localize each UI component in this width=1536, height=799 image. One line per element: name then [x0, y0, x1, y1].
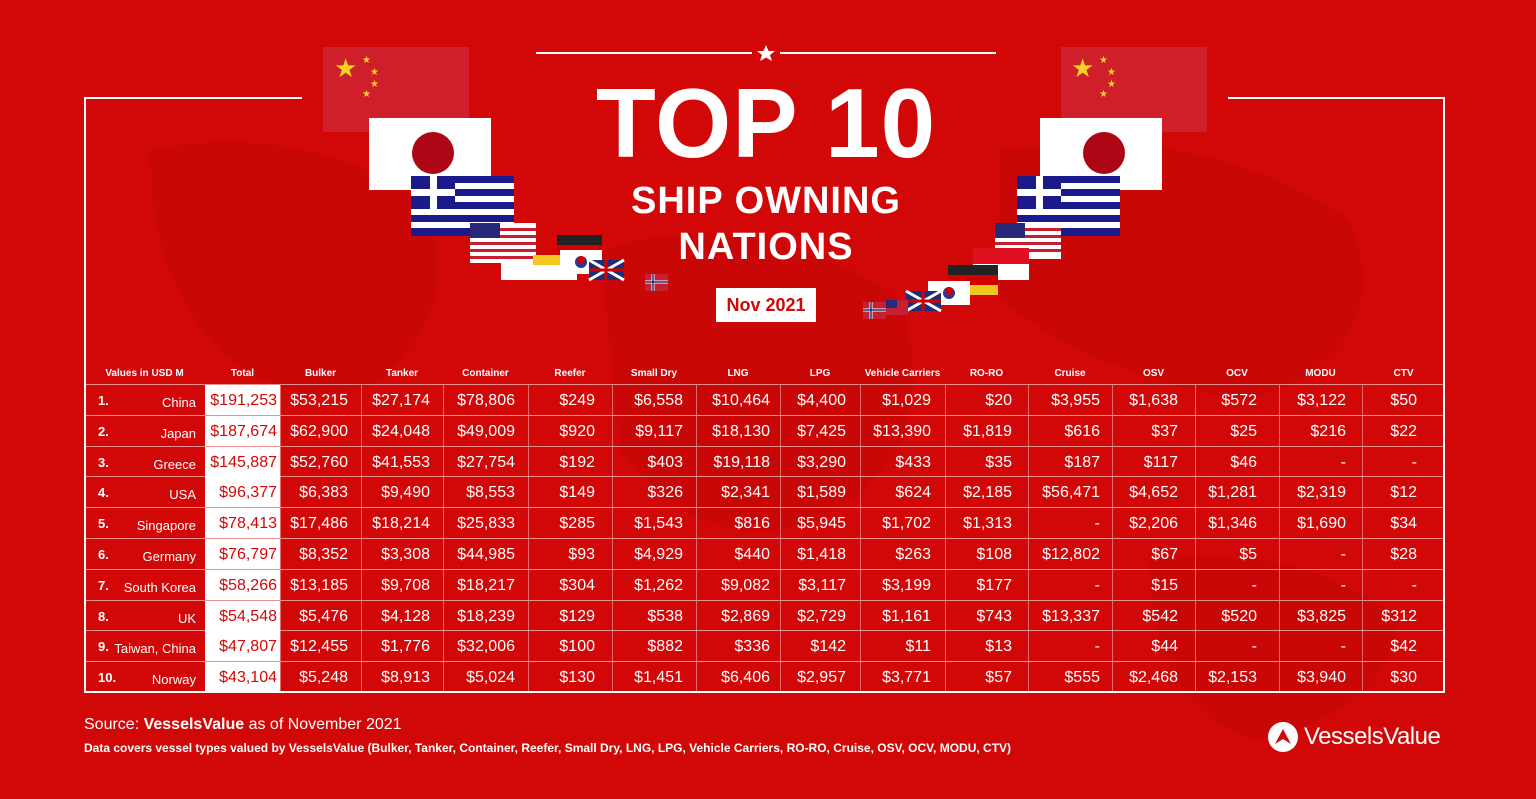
text: OSV	[1143, 368, 1164, 379]
row: China: $6,558	[634, 392, 683, 409]
row: Greece: $433	[895, 454, 931, 471]
title: SHIP OWNING	[631, 180, 901, 222]
row: Norway: $2,153	[1208, 669, 1257, 686]
row: USA: $12	[1390, 484, 1417, 501]
row: Singapore: $1,543	[634, 515, 683, 532]
row: Japan: $920	[559, 423, 595, 440]
row: Greece: 3.	[98, 455, 109, 470]
row: Greece: $403	[647, 454, 683, 471]
row: USA: $2,341	[721, 484, 770, 501]
row: Norway: $6,406	[721, 669, 770, 686]
row: UK: $2,869	[721, 608, 770, 625]
row: Singapore: $18,214	[372, 515, 430, 532]
row: Singapore: -	[1095, 515, 1100, 532]
row: Taiwan: $11	[905, 638, 931, 655]
row: Singapore: $285	[559, 515, 595, 532]
row: UK: UK	[178, 611, 196, 626]
row: Taiwan: $1,776	[381, 638, 430, 655]
row: UK: $542	[1142, 608, 1178, 625]
row: Taiwan: $336	[734, 638, 770, 655]
text: LNG	[727, 368, 749, 379]
flags: right cascade: ★	[1099, 55, 1108, 66]
text: Reefer	[554, 368, 586, 379]
flags: left cascade: ★	[370, 79, 379, 90]
row: Norway: 10.	[98, 670, 116, 685]
text: Values in USD M	[105, 368, 184, 379]
row: UK: $129	[559, 608, 595, 625]
row: China: China	[162, 395, 196, 410]
row: Japan: Japan	[161, 426, 196, 441]
row: China: $50	[1390, 392, 1417, 409]
row: South Korea: South Korea	[124, 580, 196, 595]
text: RO-RO	[970, 368, 1003, 379]
row: China: $191,253	[210, 392, 277, 409]
row: Japan: $616	[1064, 423, 1100, 440]
row: South Korea: $1,262	[634, 577, 683, 594]
row: USA: $2,185	[963, 484, 1012, 501]
source note: Source: VesselsValue as of November 2021	[84, 716, 402, 733]
row: Norway: Norway	[152, 672, 196, 687]
flags: right cascade: ★	[1071, 53, 1094, 83]
text: Total	[231, 368, 254, 379]
row: Greece: $19,118	[713, 454, 770, 471]
row: China: $27,174	[372, 392, 430, 409]
title: TOP 10	[596, 68, 936, 178]
row: Taiwan: $13	[985, 638, 1012, 655]
row: Taiwan: $47,807	[219, 638, 277, 655]
text: Vehicle Carriers	[865, 368, 940, 379]
row: China: 1.	[98, 393, 109, 408]
row: Germany: $5	[1239, 546, 1257, 563]
row: Germany: $4,929	[634, 546, 683, 563]
row: Germany: $76,797	[219, 546, 277, 563]
row: South Korea: $9,082	[721, 577, 770, 594]
row: Japan: $216	[1310, 423, 1346, 440]
row: Japan: $18,130	[712, 423, 770, 440]
row: China: $53,215	[290, 392, 348, 409]
row: Taiwan: Taiwan, China	[114, 641, 196, 656]
row: Japan: $22	[1390, 423, 1417, 440]
row: Singapore: $34	[1390, 515, 1417, 532]
row: Taiwan: -	[1341, 638, 1346, 655]
row: UK	[84, 600, 1445, 631]
row: USA: $56,471	[1042, 484, 1100, 501]
row: Greece: -	[1412, 454, 1417, 471]
row: Taiwan: $12,455	[290, 638, 348, 655]
row: South Korea	[84, 569, 1445, 600]
row: Japan: $1,819	[963, 423, 1012, 440]
row: Taiwan: -	[1252, 638, 1257, 655]
row: Greece: $35	[985, 454, 1012, 471]
row: Japan	[84, 415, 1445, 446]
row: Norway: $2,468	[1129, 669, 1178, 686]
row: Greece: $52,760	[290, 454, 348, 471]
row: Norway: $5,248	[299, 669, 348, 686]
row: Greece: $41,553	[372, 454, 430, 471]
row: USA: $2,319	[1297, 484, 1346, 501]
row: China: $1,638	[1129, 392, 1178, 409]
flags: left cascade	[323, 47, 668, 291]
row: Singapore: 5.	[98, 516, 109, 531]
row: Germany	[84, 538, 1445, 569]
row: China: $249	[559, 392, 595, 409]
row: Japan: $13,390	[873, 423, 931, 440]
row: Greece: $46	[1230, 454, 1257, 471]
row: Japan: 2.	[98, 424, 109, 439]
row: Singapore: $1,690	[1297, 515, 1346, 532]
flags: right cascade	[863, 47, 1207, 319]
row: Singapore: $2,206	[1129, 515, 1178, 532]
row: UK: $520	[1221, 608, 1257, 625]
row: China: $20	[985, 392, 1012, 409]
row: USA: USA	[169, 487, 196, 502]
row: China: $572	[1221, 392, 1257, 409]
row: China: $78,806	[457, 392, 515, 409]
row: UK: $743	[976, 608, 1012, 625]
row: South Korea: $3,199	[882, 577, 931, 594]
row: South Korea: -	[1412, 577, 1417, 594]
row: South Korea: $9,708	[381, 577, 430, 594]
row: Taiwan: -	[1095, 638, 1100, 655]
text: Cruise	[1054, 368, 1086, 379]
row: South Korea: $3,117	[798, 577, 846, 594]
row: UK: 8.	[98, 609, 109, 624]
row: Taiwan: $42	[1390, 638, 1417, 655]
flags: left cascade: ★	[362, 55, 371, 66]
row: USA	[84, 476, 1445, 507]
row: Germany: 6.	[98, 547, 109, 562]
row: USA: $8,553	[466, 484, 515, 501]
row: Taiwan: 9.	[98, 639, 109, 654]
row: USA: $149	[559, 484, 595, 501]
flags: right cascade: ★	[1107, 67, 1116, 78]
flags: left cascade: ★	[362, 89, 371, 100]
text: Small Dry	[631, 368, 677, 379]
row: Germany: $93	[568, 546, 595, 563]
row: USA: $624	[895, 484, 931, 501]
row: Germany: $44,985	[457, 546, 515, 563]
row: Singapore: $1,702	[882, 515, 931, 532]
row: Singapore: $1,313	[963, 515, 1012, 532]
row: Norway: $30	[1390, 669, 1417, 686]
row: Germany: -	[1341, 546, 1346, 563]
row: China: $3,955	[1051, 392, 1100, 409]
row: Taiwan: $882	[647, 638, 683, 655]
row: China: $10,464	[712, 392, 770, 409]
row: Greece: $192	[559, 454, 595, 471]
row: USA: $326	[647, 484, 683, 501]
row: Germany: $28	[1390, 546, 1417, 563]
row: Germany: $108	[976, 546, 1012, 563]
table rows	[86, 384, 1443, 691]
row: Japan: $49,009	[457, 423, 515, 440]
row: Taiwan: $44	[1151, 638, 1178, 655]
row: Singapore: $25,833	[457, 515, 515, 532]
row: South Korea: $13,185	[290, 577, 348, 594]
text: MODU	[1305, 368, 1336, 379]
row: Norway: $2,957	[797, 669, 846, 686]
row: South Korea: $18,217	[457, 577, 515, 594]
row: Norway: $43,104	[219, 669, 277, 686]
row: Japan: $25	[1230, 423, 1257, 440]
row: Japan: $7,425	[797, 423, 846, 440]
row: Germany: $67	[1151, 546, 1178, 563]
row: Taiwan: $32,006	[457, 638, 515, 655]
flags: right cascade: ★	[1099, 89, 1108, 100]
title	[596, 68, 936, 268]
flags: left cascade: ★	[334, 53, 357, 83]
row: Norway: $555	[1064, 669, 1100, 686]
row: Norway	[84, 661, 1445, 692]
flags: left cascade: ★	[370, 67, 379, 78]
row: Greece: $187	[1064, 454, 1100, 471]
row: USA: 4.	[98, 485, 109, 500]
row: South Korea: $177	[976, 577, 1012, 594]
row: USA: $9,490	[381, 484, 430, 501]
row: Germany: $440	[734, 546, 770, 563]
row: UK: $538	[647, 608, 683, 625]
text: Tanker	[386, 368, 418, 379]
row: UK: $3,825	[1297, 608, 1346, 625]
row: UK: $1,161	[882, 608, 931, 625]
row: Norway: $1,451	[634, 669, 683, 686]
row: Germany: Germany	[143, 549, 196, 564]
row: Taiwan: $142	[810, 638, 846, 655]
title: NATIONS	[678, 226, 854, 268]
row: Greece: -	[1341, 454, 1346, 471]
text: CTV	[1394, 368, 1414, 379]
date badge: Nov 2021	[726, 295, 806, 315]
row: China: $3,122	[1297, 392, 1346, 409]
row: USA: $1,589	[797, 484, 846, 501]
row: South Korea: $304	[559, 577, 595, 594]
row: UK: $312	[1381, 608, 1417, 625]
row: South Korea: -	[1095, 577, 1100, 594]
row: USA: $96,377	[219, 484, 277, 501]
row: USA: $4,652	[1129, 484, 1178, 501]
date badge	[716, 288, 816, 322]
row: Norway: $8,913	[381, 669, 430, 686]
row: Singapore: $816	[734, 515, 770, 532]
row: Norway: $3,771	[882, 669, 931, 686]
row: South Korea: 7.	[98, 578, 109, 593]
flags: right cascade: ★	[1107, 79, 1116, 90]
row: Germany: $8,352	[299, 546, 348, 563]
row: Singapore: $5,945	[797, 515, 846, 532]
text: LPG	[810, 368, 830, 379]
row: South Korea: $58,266	[219, 577, 277, 594]
row: UK: $18,239	[457, 608, 515, 625]
text: Container	[462, 368, 509, 379]
row: Singapore: Singapore	[137, 518, 196, 533]
row: Taiwan: $100	[559, 638, 595, 655]
row: Norway: $57	[985, 669, 1012, 686]
row: China	[84, 384, 1445, 415]
row: South Korea: -	[1341, 577, 1346, 594]
text: OCV	[1226, 368, 1248, 379]
row: South Korea: -	[1252, 577, 1257, 594]
logo: VesselsValue: VesselsValue	[1304, 723, 1440, 750]
row: Greece: $117	[1144, 454, 1178, 471]
row: Greece: $3,290	[797, 454, 846, 471]
data coverage note: Data covers vessel types valued by VesselsValue (Bulker, Tanker, Container, Reefer, Small Dry, LNG, LPG, Vehicle Carriers, RO-RO, Cruise, OSV, OCV, MODU, CTV)	[84, 741, 1011, 755]
row: UK: $54,548	[219, 608, 277, 625]
row: Japan: $62,900	[290, 423, 348, 440]
row: UK: $4,128	[381, 608, 430, 625]
row: Germany: $3,308	[381, 546, 430, 563]
row: Greece: $145,887	[210, 454, 277, 471]
row: Germany: $263	[895, 546, 931, 563]
row: China: $1,029	[882, 392, 931, 409]
row: UK: $13,337	[1042, 608, 1100, 625]
row: Norway: $5,024	[466, 669, 515, 686]
row: Singapore: $17,486	[290, 515, 348, 532]
row: UK: $5,476	[299, 608, 348, 625]
table header	[105, 368, 1414, 379]
row: Singapore: $1,346	[1208, 515, 1257, 532]
row: Japan: $24,048	[372, 423, 430, 440]
row: China: $4,400	[797, 392, 846, 409]
row: Japan: $37	[1151, 423, 1178, 440]
text: Bulker	[305, 368, 336, 379]
row: Japan: $187,674	[210, 423, 277, 440]
row: Germany: $1,418	[797, 546, 846, 563]
row: Singapore: $78,413	[219, 515, 277, 532]
row: Germany: $12,802	[1042, 546, 1100, 563]
row: USA: $6,383	[299, 484, 348, 501]
row: Norway: $130	[559, 669, 595, 686]
row: Singapore	[84, 507, 1445, 538]
row: Greece: Greece	[153, 457, 196, 472]
row: Japan: $9,117	[635, 423, 683, 440]
row: South Korea: $15	[1151, 577, 1178, 594]
row: UK: $2,729	[797, 608, 846, 625]
row: Taiwan	[84, 630, 1445, 661]
row: USA: $1,281	[1208, 484, 1257, 501]
row: Norway: $3,940	[1297, 669, 1346, 686]
row: Greece: $27,754	[457, 454, 515, 471]
row: Greece	[84, 446, 1445, 477]
